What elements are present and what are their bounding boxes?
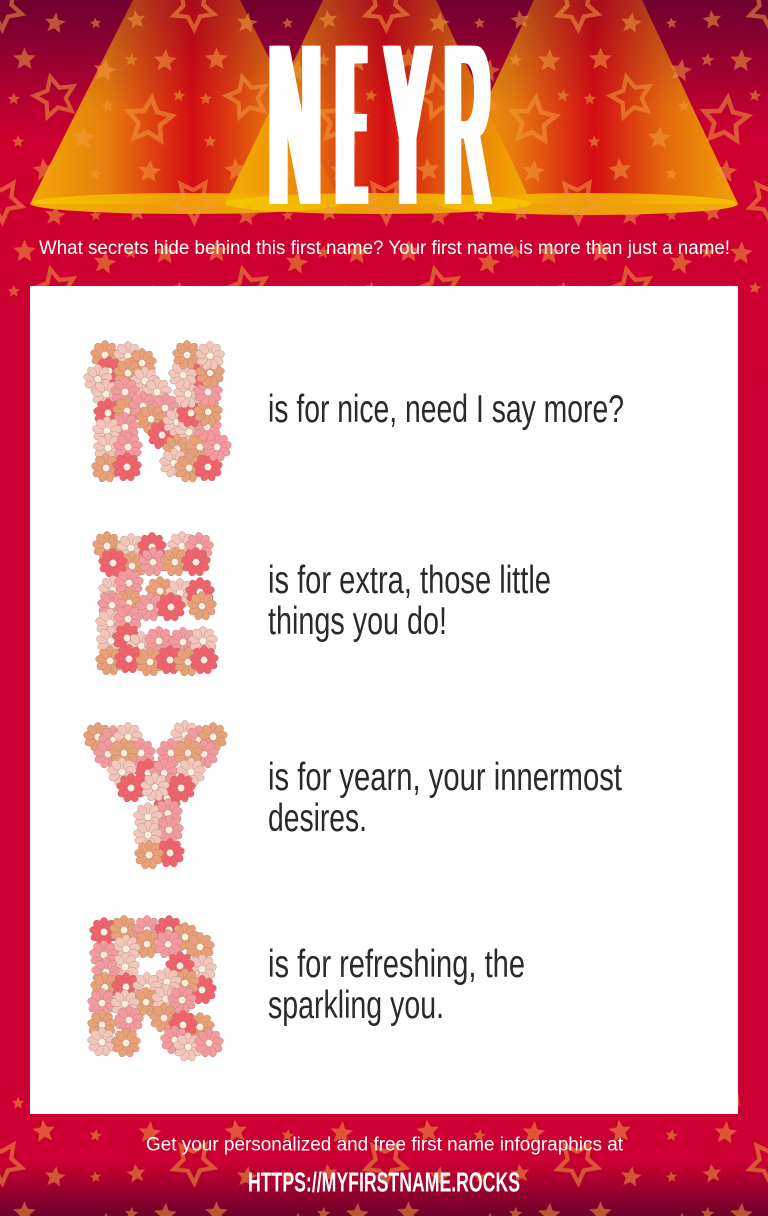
text: R lines — [268, 943, 525, 1027]
footer url: HTTPS://MYFIRSTNAME.ROCKS — [248, 1166, 520, 1198]
title: NEYR: R — [445, 0, 490, 253]
flower letter R — [87, 915, 224, 1062]
text: R lines: sparkling you. — [268, 984, 444, 1027]
flower letter E — [92, 531, 219, 677]
subtitle: What secrets hide behind this first name? Your first name is more than just a name! — [39, 238, 730, 259]
text: E lines: is for extra, those little — [268, 559, 551, 602]
text: R lines: is for refreshing, the — [268, 943, 525, 986]
title: NEYR — [269, 0, 492, 253]
spotlights — [30, 0, 738, 215]
spotlight: left — [30, 0, 342, 214]
text: E lines — [268, 559, 551, 643]
spotlight: centre — [225, 0, 532, 214]
star pattern: top — [0, 0, 768, 303]
flower letter N — [83, 340, 232, 483]
white panel — [30, 286, 738, 1114]
title: NEYR: N — [270, 0, 319, 253]
text: Y lines: is for yearn, your innermost — [268, 756, 622, 799]
title: NEYR: E — [341, 0, 362, 253]
text: E lines: things you do! — [268, 600, 447, 643]
star pattern: bottom — [0, 1093, 768, 1216]
title: NEYR: Y — [387, 0, 428, 253]
flower letter Y — [83, 720, 228, 870]
text: Y lines: desires. — [268, 797, 367, 840]
text: Y lines — [268, 756, 622, 840]
footer call to action: Get your personalized and free first name infographics at — [146, 1134, 624, 1156]
text: N line: is for nice, need I say more? — [268, 388, 624, 431]
spotlight: right — [438, 0, 738, 215]
